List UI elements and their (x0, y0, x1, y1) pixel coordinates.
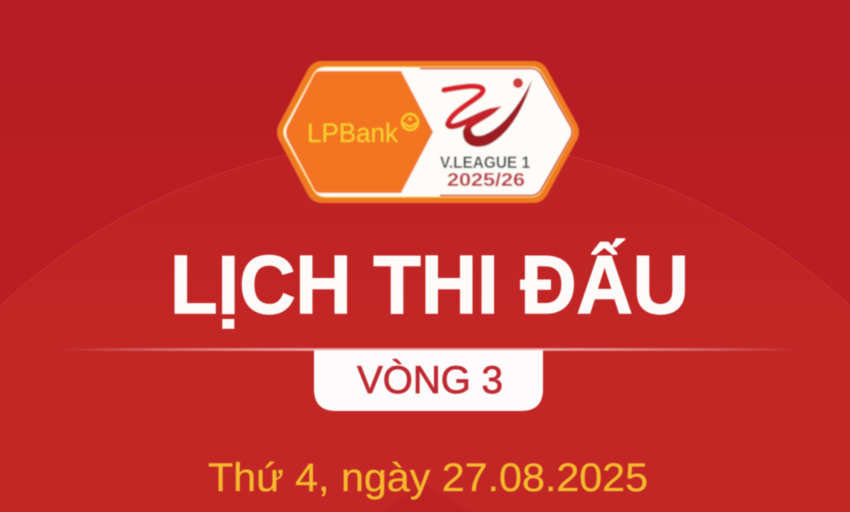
badge white body (284, 67, 573, 197)
sponsor coin icon (402, 114, 418, 130)
match date: Thứ 4, ngày 27.08.2025 (208, 456, 648, 500)
V.League ball icon (513, 78, 523, 88)
round label pill (314, 350, 543, 411)
sponsor name: LPBank (307, 118, 398, 148)
round label text: VÒNG 3 (357, 359, 503, 402)
title: LỊCH THI ĐẤU (170, 237, 689, 331)
orange sponsor panel (286, 71, 433, 193)
badge red inner outline (420, 68, 572, 196)
league logo badge (277, 61, 579, 203)
background arc (0, 139, 850, 512)
badge outer border (277, 61, 579, 203)
V.League ribbon mark (444, 80, 532, 147)
divider rule (60, 348, 800, 351)
league name: V.LEAGUE 1 (440, 153, 530, 172)
season: 2025/26 (447, 170, 525, 190)
bottom triangle accent (380, 484, 470, 512)
